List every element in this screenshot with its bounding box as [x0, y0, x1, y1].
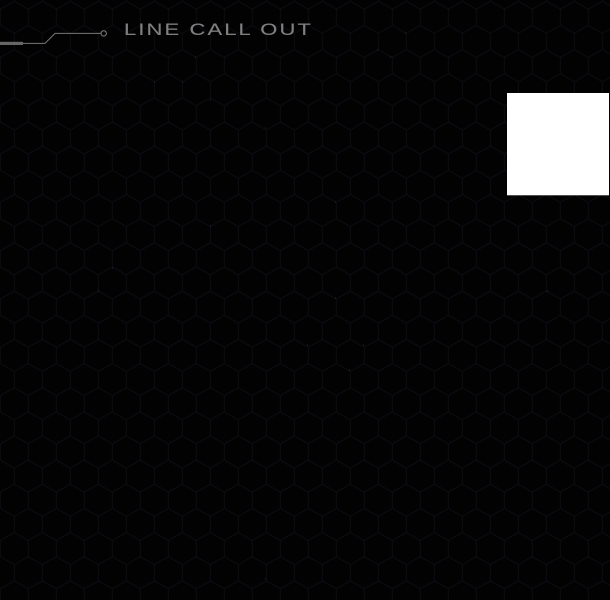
icon: callout end circle	[101, 31, 106, 36]
white square panel	[507, 93, 609, 195]
callout text: LINE CALL OUT	[124, 21, 313, 39]
line callout connector	[0, 31, 106, 45]
